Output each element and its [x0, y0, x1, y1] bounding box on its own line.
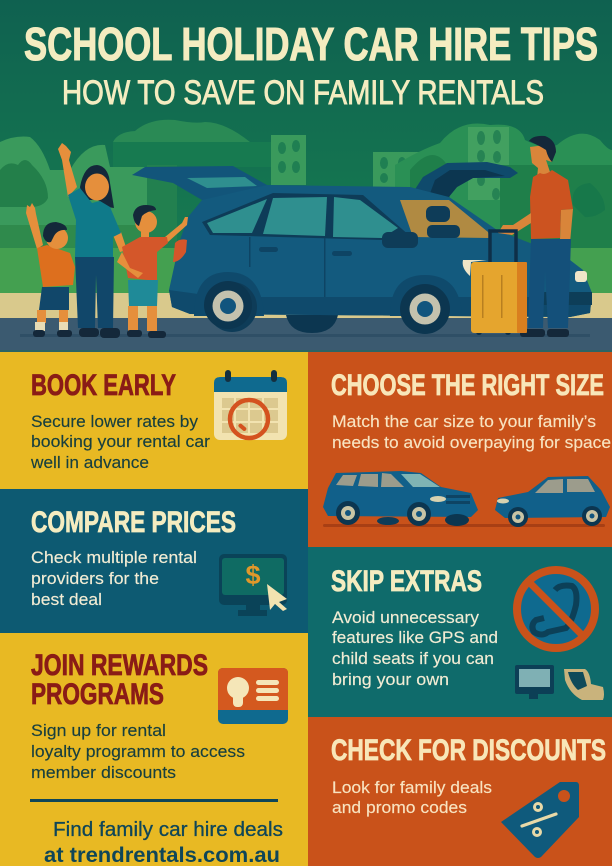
icon: handheld device	[564, 669, 604, 700]
icon: small car	[495, 476, 610, 527]
text: compare prices: best deal	[31, 590, 102, 609]
icon: no child seat	[517, 570, 595, 648]
text: join rewards programs: Sign up for rental	[31, 721, 166, 740]
background trees and buildings	[0, 120, 612, 250]
text: check for discounts: Look for family deals	[332, 778, 492, 797]
heading: join rewards programs	[31, 649, 208, 711]
text: join rewards programs: member discounts	[31, 763, 176, 782]
icon: large SUV	[323, 471, 478, 526]
icon: rewards card	[218, 668, 288, 724]
heading: compare prices: COMPARE PRICES	[31, 506, 236, 539]
text: skip extras: bring your own	[332, 670, 449, 689]
heading: book early: BOOK EARLY	[31, 369, 176, 402]
family: child waving	[26, 203, 75, 337]
ground: lawn, pavement and road	[0, 248, 612, 350]
text: skip extras: child seats if you can	[332, 649, 494, 668]
text: skip extras: features like GPS and	[332, 628, 498, 647]
panel: check for discounts	[308, 717, 612, 866]
panel: choose the right size	[308, 352, 612, 547]
panel: skip extras	[308, 547, 612, 717]
front wheel	[390, 275, 462, 334]
text: choose the right size: Match the car size to your family’s	[332, 412, 596, 431]
father with suitcase	[471, 136, 573, 337]
icon: calendar with magnifier	[214, 370, 287, 440]
icon: monitor with dollar and cursor	[219, 554, 287, 616]
panel: compare prices	[0, 489, 308, 633]
panel: book early	[0, 352, 308, 489]
icon: GPS screen	[515, 665, 554, 699]
text: book early: booking your rental car	[31, 432, 210, 451]
heading: join rewards programs: PROGRAMS	[31, 678, 164, 711]
text: join rewards programs	[31, 721, 245, 782]
text: compare prices: Check multiple rental	[31, 548, 197, 567]
icon: discount tag	[501, 782, 579, 858]
text: compare prices	[31, 548, 197, 609]
family: child reaching out	[117, 205, 188, 338]
car with open doors	[132, 162, 592, 334]
divider band	[0, 350, 612, 352]
text: choose the right size: needs to avoid overpaying for space	[332, 433, 611, 452]
rear wheel	[194, 272, 264, 332]
text: skip extras: Avoid unnecessary	[332, 608, 479, 627]
header scene panel	[0, 0, 612, 350]
call to action: Find family car hire deals	[53, 819, 283, 841]
text: join rewards programs: loyalty programm to access	[31, 742, 245, 761]
text: book early: Secure lower rates by	[31, 412, 199, 431]
text: book early	[30, 412, 210, 472]
family: mother waving	[58, 143, 127, 338]
call to action	[44, 819, 283, 866]
heading: join rewards programs: JOIN REWARDS	[31, 649, 208, 682]
text: check for discounts: and promo codes	[332, 798, 467, 817]
text: book early: well in advance	[30, 453, 149, 472]
text: choose the right size	[332, 412, 611, 452]
text: skip extras	[332, 608, 498, 689]
text: check for discounts	[332, 778, 492, 817]
icon: monitor with dollar and cursor: $	[245, 560, 261, 590]
text: compare prices: providers for the	[31, 569, 159, 588]
heading: skip extras: SKIP EXTRAS	[331, 565, 482, 598]
panel: join rewards programs	[0, 633, 308, 866]
